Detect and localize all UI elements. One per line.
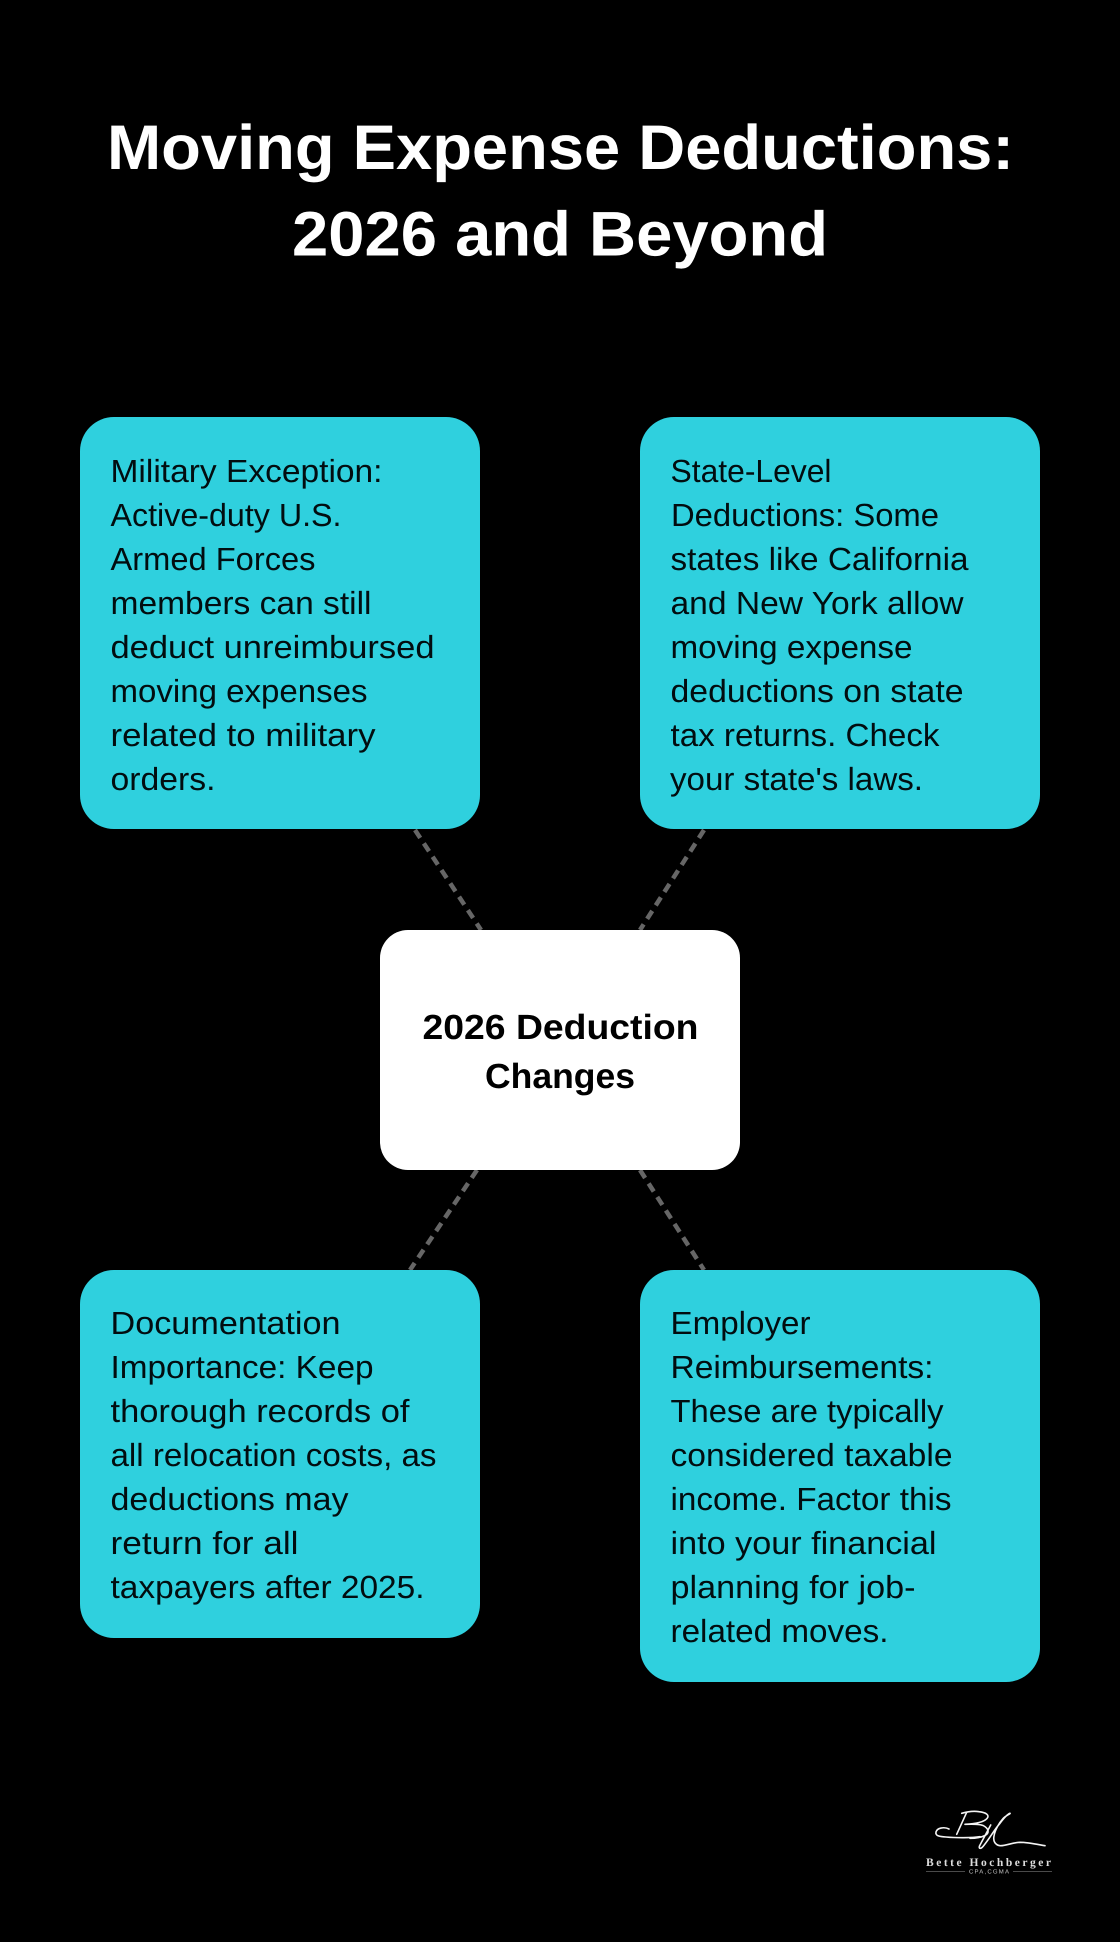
text: employer reimbursements body: related moves.	[670, 1613, 888, 1649]
text: employer reimbursements body: considered taxable	[670, 1437, 952, 1473]
panel: employer reimbursements	[640, 1270, 1040, 1682]
text: documentation importance body: return for all	[110, 1525, 298, 1561]
text: state-level deductions body: Deductions: Some	[671, 497, 939, 533]
dashed connector: military exception to center	[415, 830, 481, 930]
text: documentation importance body: Documentation	[110, 1305, 340, 1341]
text: employer reimbursements body: into your financial	[670, 1525, 936, 1561]
text: state-level deductions body: your state's laws.	[670, 761, 923, 797]
text: documentation importance body: all relocation costs, as	[110, 1437, 436, 1473]
left rule	[926, 1871, 965, 1873]
panel: center topic	[380, 930, 740, 1170]
icon: BH signature	[936, 1811, 1045, 1848]
text: documentation importance body: Importance: Keep	[110, 1349, 374, 1385]
text: 2026 deduction changes	[422, 1008, 698, 1096]
text: military exception body: Active-duty U.S.	[110, 497, 342, 533]
text: 2026 deduction changes: 2026 Deduction	[422, 1008, 698, 1047]
panel: state-level deductions	[640, 417, 1040, 829]
text: military exception body	[110, 453, 435, 797]
dashed connector: center to documentation importance	[410, 1170, 477, 1270]
text: military exception body: deduct unreimbursed	[110, 629, 435, 665]
dashed connector: state-level deductions to center	[640, 830, 704, 930]
text: military exception body: members can still	[110, 585, 372, 621]
logo: Bette Hochberger signature	[926, 1811, 1052, 1876]
text: military exception body: Armed Forces	[110, 541, 316, 577]
text: employer reimbursements body: Employer	[670, 1305, 811, 1341]
text: state-level deductions body: and New York allow	[670, 585, 964, 621]
text: employer reimbursements body: These are typically	[670, 1393, 944, 1429]
text: state-level deductions body: moving expense	[670, 629, 912, 665]
text: state-level deductions body: states like California	[670, 541, 969, 577]
text: state-level deductions body	[670, 453, 969, 797]
text: military exception body: orders.	[110, 761, 216, 797]
title	[107, 113, 1014, 270]
text: documentation importance body: deductions may	[110, 1481, 348, 1517]
text: Bette Hochberger: Bette Hochberger	[926, 1857, 1051, 1869]
text: state-level deductions body: deductions on state	[670, 673, 964, 709]
right rule	[1013, 1871, 1052, 1873]
text: employer reimbursements body: income. Factor this	[670, 1481, 952, 1517]
text: CPA, CGMA: CPA,CGMA	[969, 1868, 1009, 1876]
text: employer reimbursements body: planning for job-	[670, 1569, 916, 1605]
panel: military exception	[80, 417, 480, 829]
text: documentation importance body: thorough records of	[110, 1393, 410, 1429]
text: documentation importance body: taxpayers after 2025.	[110, 1569, 424, 1605]
title: Moving Expense Deductions:	[107, 113, 1014, 183]
text: military exception body: moving expenses	[110, 673, 368, 709]
text: state-level deductions body: tax returns. Check	[670, 717, 941, 753]
text: employer reimbursements body	[670, 1305, 952, 1649]
text: documentation importance body	[110, 1305, 436, 1605]
text: military exception body: Military Exception:	[110, 453, 382, 489]
panel: documentation importance	[80, 1270, 480, 1638]
dashed connector: center to employer reimbursements	[640, 1170, 704, 1270]
title: 2026 and Beyond	[292, 200, 828, 270]
text: employer reimbursements body: Reimbursements:	[670, 1349, 934, 1385]
text: state-level deductions body: State-Level	[670, 453, 832, 489]
text: military exception body: related to military	[110, 717, 376, 753]
text: 2026 deduction changes: Changes	[485, 1057, 635, 1096]
